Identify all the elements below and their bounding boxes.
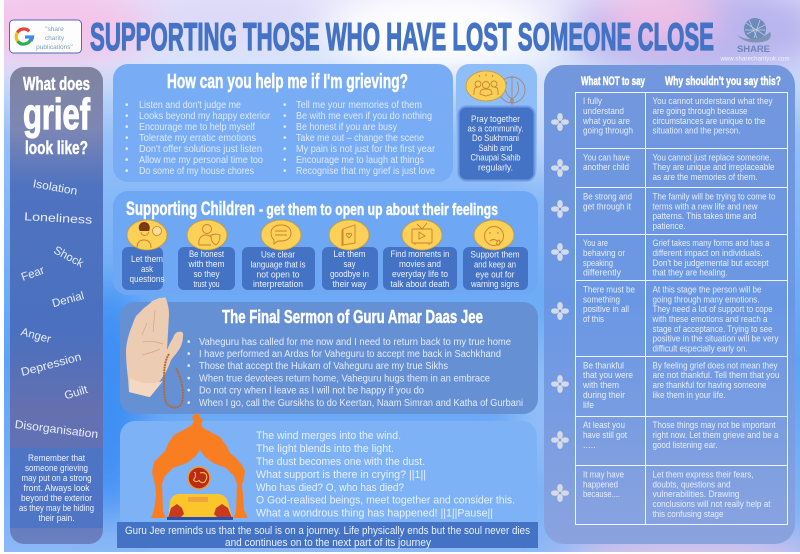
list: left column: • bbox=[125, 144, 129, 155]
list: right column: My pain is not just for the first year bbox=[296, 144, 436, 155]
list: left column: • bbox=[125, 133, 129, 144]
table text: get through it bbox=[583, 202, 631, 212]
grief words: Disorganisation bbox=[14, 419, 99, 441]
table text: what you are bbox=[582, 116, 630, 126]
table text: terms with a new life and new bbox=[652, 202, 758, 212]
card: clear language bbox=[242, 220, 315, 290]
verse bbox=[256, 430, 515, 520]
list: sermon: When true devotees return home, Vaheguru hugs them in an embrace bbox=[199, 374, 491, 384]
table text: You can have bbox=[583, 152, 630, 162]
table text bbox=[582, 96, 780, 519]
list: sermon: • bbox=[187, 361, 191, 372]
table text: right now. Let them grieve and be a bbox=[652, 430, 779, 440]
verse: What support is there in crying? ||1|| bbox=[256, 469, 426, 481]
list: sermon: Do not cry when I leave as I will not be happy if you do bbox=[199, 386, 425, 396]
grief words: Denial bbox=[51, 290, 86, 310]
card: be honest: trust you bbox=[194, 279, 220, 289]
table text: have still got bbox=[583, 430, 627, 440]
table text: stage of acceptance. Trying to see bbox=[652, 324, 772, 334]
table text: something bbox=[583, 294, 620, 304]
table text: They are unique and irreplaceable bbox=[652, 162, 774, 172]
list: right column: Recognise that my grief is just love bbox=[296, 166, 435, 177]
list: left column: Tolerate my erratic emotions bbox=[139, 133, 256, 144]
icon: G logo bbox=[16, 29, 32, 44]
list: right column: • bbox=[283, 144, 287, 155]
table text: Don't be judgemental but accept bbox=[652, 258, 769, 268]
table text: are thankful for having someone bbox=[652, 380, 766, 390]
list: right column: • bbox=[283, 166, 287, 177]
heading: The Final Sermon of Guru Amar Daas Jee bbox=[222, 307, 483, 327]
table text: The family will be trying to come to bbox=[652, 192, 776, 202]
heading: what does grief look like: grief bbox=[23, 90, 90, 139]
table text: with them bbox=[582, 380, 619, 390]
panel: supporting children bbox=[113, 191, 538, 295]
table text: circumstances are unique to the bbox=[652, 116, 766, 126]
table text: Those things may not be important bbox=[652, 420, 776, 430]
list: sermon: • bbox=[187, 386, 191, 396]
verse: The wind merges into the wind. bbox=[256, 430, 401, 442]
list: right column: Tell me your memories of them bbox=[296, 100, 422, 111]
note: remember: as they may be hiding bbox=[19, 503, 94, 513]
grief words: Loneliness bbox=[24, 211, 93, 227]
card: warning signs: warning signs bbox=[470, 279, 519, 289]
note: remember bbox=[10, 448, 103, 528]
text: pray bbox=[458, 106, 534, 180]
table text: speaking bbox=[583, 258, 613, 268]
table text: conclusions will not really help at bbox=[652, 499, 771, 509]
list: sermon: Vaheguru has called for me now and I need to return back to my true home bbox=[199, 337, 512, 348]
icon: orange canopy with Guru Granth Sahib bbox=[151, 413, 248, 520]
table text: You are bbox=[583, 238, 608, 248]
card: ask questions bbox=[122, 220, 167, 290]
text: pray: regularly. bbox=[478, 162, 513, 172]
table text: happened bbox=[583, 480, 618, 490]
panel: what not to say bbox=[544, 65, 795, 544]
table text: of this bbox=[583, 314, 604, 324]
panel: how can you help me bbox=[113, 64, 453, 182]
table text: At this stage the person will be bbox=[652, 284, 762, 294]
table text: positive in all bbox=[583, 304, 629, 314]
table text: with these emotions and reach a bbox=[652, 314, 768, 324]
table text: behaving or bbox=[583, 248, 625, 258]
table text: Grief takes many forms and has a bbox=[652, 238, 770, 248]
verse: Who has died? O, who has died? bbox=[256, 482, 404, 494]
card: be honest bbox=[178, 220, 235, 290]
card: clear language: Use clear bbox=[261, 250, 295, 260]
column headings bbox=[581, 74, 781, 88]
heading: what does grief look like: What does bbox=[23, 74, 90, 94]
heading: what does grief look like bbox=[23, 74, 90, 158]
table text: differently bbox=[583, 268, 621, 278]
card: ask questions: Let them bbox=[131, 254, 163, 264]
card: say goodbye bbox=[322, 220, 378, 290]
list: right column: • bbox=[283, 155, 287, 166]
table text: Be strong and bbox=[583, 192, 632, 202]
card: ask questions: questions bbox=[130, 274, 165, 284]
card: say goodbye: goodbye in bbox=[330, 269, 369, 279]
panel: shabad verse bbox=[120, 413, 537, 531]
list: left column: Listen and don't judge me bbox=[139, 100, 241, 111]
card: clear language: language that is bbox=[250, 260, 306, 270]
heading: what does grief look like: look like? bbox=[25, 138, 88, 158]
list: sermon: • bbox=[187, 337, 191, 348]
list: sermon: • bbox=[187, 374, 191, 384]
list: left column: • bbox=[125, 100, 129, 111]
table text: difficult especially early on. bbox=[652, 344, 748, 354]
card: warning signs: eye out for bbox=[476, 270, 514, 280]
table text: like them in your life. bbox=[652, 390, 726, 400]
list: left column: • bbox=[125, 122, 129, 133]
table text: At least you bbox=[583, 420, 625, 430]
panel: pray together bbox=[456, 64, 537, 182]
list: sermon: • bbox=[187, 398, 191, 409]
grief words: Depression bbox=[20, 351, 83, 379]
grief words: Shock bbox=[51, 245, 86, 270]
list: right column: Encourage me to laugh at things bbox=[296, 155, 424, 166]
list: left column: • bbox=[125, 155, 129, 166]
card: be honest: with them bbox=[188, 259, 225, 269]
note: remember: someone grieving bbox=[25, 463, 88, 473]
table text: positive in the situation will be very bbox=[652, 334, 779, 344]
heading: How can you help me if I'm grieving? bbox=[167, 71, 408, 93]
card: say goodbye: Let them bbox=[334, 249, 366, 259]
logo badge: share charity publications: "share bbox=[45, 26, 64, 33]
card: movies: Find moments in bbox=[390, 249, 450, 259]
note: remember: Remember that bbox=[28, 453, 85, 463]
list: left column bbox=[125, 100, 271, 177]
heading: Supporting Children bbox=[126, 199, 255, 220]
table text: are not thankful. Tell them that you bbox=[652, 370, 780, 380]
list: right column: Be honest if you are busy bbox=[296, 122, 397, 133]
card: warning signs: Support them bbox=[470, 250, 520, 260]
card: movies: talk about death bbox=[390, 279, 450, 289]
icons: flowers bbox=[551, 113, 569, 502]
table text: patience. bbox=[652, 221, 686, 231]
table text: during their bbox=[583, 390, 625, 400]
table text: are going through because bbox=[652, 106, 748, 116]
card: ask questions: ask bbox=[141, 264, 153, 274]
table text: Let them express their fears, bbox=[652, 470, 754, 480]
note: remember: may put on a strong bbox=[22, 473, 92, 483]
icon: khanda outline bbox=[499, 76, 525, 105]
list: right column: • bbox=[283, 100, 287, 111]
card: movies bbox=[383, 220, 457, 290]
table text: as are the memories of them. bbox=[652, 172, 758, 182]
verse: The light blends into the light. bbox=[256, 443, 394, 455]
table text: life bbox=[583, 400, 594, 410]
table text: vulnerabilities. Drawing bbox=[652, 489, 740, 499]
table text: You cannot just replace someone. bbox=[652, 152, 772, 162]
caption: soul journey: and continues on to the next part of its journey bbox=[225, 537, 431, 549]
list: right column: Take me out – change the scene bbox=[296, 133, 424, 144]
caption: soul journey bbox=[117, 522, 538, 549]
list: left column: • bbox=[125, 111, 129, 122]
verse: What a wondrous thing has happened! ||1||Pause|| bbox=[256, 508, 493, 520]
list: right column bbox=[283, 100, 436, 177]
list: right column: • bbox=[283, 111, 287, 122]
grief words: Isolation bbox=[32, 178, 78, 198]
logo badge: share charity publications: publications" bbox=[36, 44, 74, 51]
list: sermon bbox=[187, 337, 523, 409]
table text: this confusing stage bbox=[652, 509, 724, 519]
table grid bbox=[576, 92, 788, 524]
icon: hand with beads bbox=[126, 297, 183, 408]
table text: that you were bbox=[583, 370, 633, 380]
table text: understand bbox=[583, 106, 624, 116]
list: left column: Encourage me to help myself bbox=[139, 122, 255, 133]
panel: what does grief look like bbox=[10, 67, 103, 544]
list: left column: Allow me my personal time too bbox=[139, 155, 263, 166]
card: say goodbye: say bbox=[344, 259, 356, 269]
list: right column: • bbox=[283, 133, 287, 144]
table text: Be thankful bbox=[583, 360, 624, 370]
card: warning signs bbox=[463, 220, 528, 290]
table text: It may have bbox=[583, 470, 624, 480]
list: right column: Be with me even if you do nothing bbox=[296, 111, 432, 122]
card: clear language: not open to bbox=[256, 270, 300, 280]
table text: good listening ear. bbox=[652, 440, 718, 450]
icon: community bbox=[466, 71, 506, 101]
list: sermon: Those that accept the Hukam of Vaheguru are my true Sikhs bbox=[199, 361, 448, 372]
caption: soul journey: Guru Jee reminds us that the soul is on a journey. Life physically ends but the soul never dies bbox=[125, 525, 530, 537]
card: movies: movies and bbox=[399, 259, 441, 269]
table text: going through many emotions. bbox=[652, 294, 760, 304]
card: movies: everyday life to bbox=[392, 269, 448, 279]
card: be honest: Be honest bbox=[189, 249, 224, 259]
logo: SHARE charity globe: www.sharecharityuk.com bbox=[720, 56, 790, 62]
list: left column: Do some of my house chores bbox=[139, 166, 254, 177]
note: remember: front. Always look bbox=[24, 483, 90, 493]
text: pray: Chaupai Sahib bbox=[470, 152, 520, 162]
text: pray: as a community. bbox=[468, 124, 524, 134]
card: clear language: interpretation bbox=[253, 279, 303, 289]
logo: SHARE charity globe: SHARE bbox=[737, 44, 770, 55]
note: remember: beyond the exterior bbox=[21, 493, 92, 503]
list: left column: Don't offer solutions just listen bbox=[139, 144, 262, 155]
table text: doubts, questions and bbox=[652, 480, 730, 490]
logo: SHARE charity globe bbox=[720, 18, 790, 62]
heading: - get them to open up about their feelings bbox=[259, 200, 498, 219]
note: remember: their pain. bbox=[38, 513, 74, 523]
list: left column: • bbox=[125, 166, 129, 177]
table text: another child bbox=[583, 162, 629, 172]
text: pray: Pray together bbox=[471, 114, 520, 124]
text: pray: Do Sukhmani bbox=[472, 133, 519, 143]
table text: I fully bbox=[583, 96, 602, 106]
card: say goodbye: their way bbox=[332, 279, 367, 289]
text: pray: Sahib and bbox=[478, 143, 512, 153]
grief words bbox=[14, 178, 99, 441]
verse: The dust becomes one with the dust. bbox=[256, 456, 425, 468]
logo badge: share charity publications bbox=[10, 20, 82, 53]
list: right column: • bbox=[283, 122, 287, 133]
list: sermon: • bbox=[187, 349, 191, 360]
heading bbox=[126, 199, 498, 220]
list: left column: Looks beyond my happy exterior bbox=[139, 111, 271, 122]
column headings: What NOT to say bbox=[581, 74, 645, 88]
table text: You cannot understand what they bbox=[652, 96, 773, 106]
table text: There must be bbox=[583, 284, 635, 294]
table text: ..... bbox=[583, 440, 596, 450]
table text: because.... bbox=[583, 489, 620, 499]
list: sermon: I have performed an Ardas for Vaheguru to accept me back in Sachkhand bbox=[199, 349, 501, 360]
verse: O God-realised beings, meet together and consider this. bbox=[256, 494, 515, 506]
table text: situation and the person. bbox=[652, 126, 740, 136]
card: be honest: so they bbox=[194, 269, 220, 279]
panel: final sermon bbox=[120, 297, 538, 414]
table text: patterns. This takes time and bbox=[652, 211, 756, 221]
grief words: Fear bbox=[20, 264, 46, 284]
grief words: Guilt bbox=[63, 384, 90, 402]
table text: By feeling grief does not mean they bbox=[652, 360, 778, 370]
grief words: Anger bbox=[19, 326, 52, 346]
table text: different impact on individuals. bbox=[652, 248, 762, 258]
table text: They need a lot of support to cope bbox=[652, 304, 772, 314]
card: warning signs: and keep an bbox=[474, 260, 516, 270]
table text: going through bbox=[583, 126, 633, 136]
table text: that they are healing. bbox=[652, 268, 728, 278]
logo badge: share charity publications: charity bbox=[45, 35, 65, 42]
list: sermon: When I go, call the Gursikhs to do Keertan, Naam Simran and Katha of Gurbani bbox=[199, 398, 523, 409]
